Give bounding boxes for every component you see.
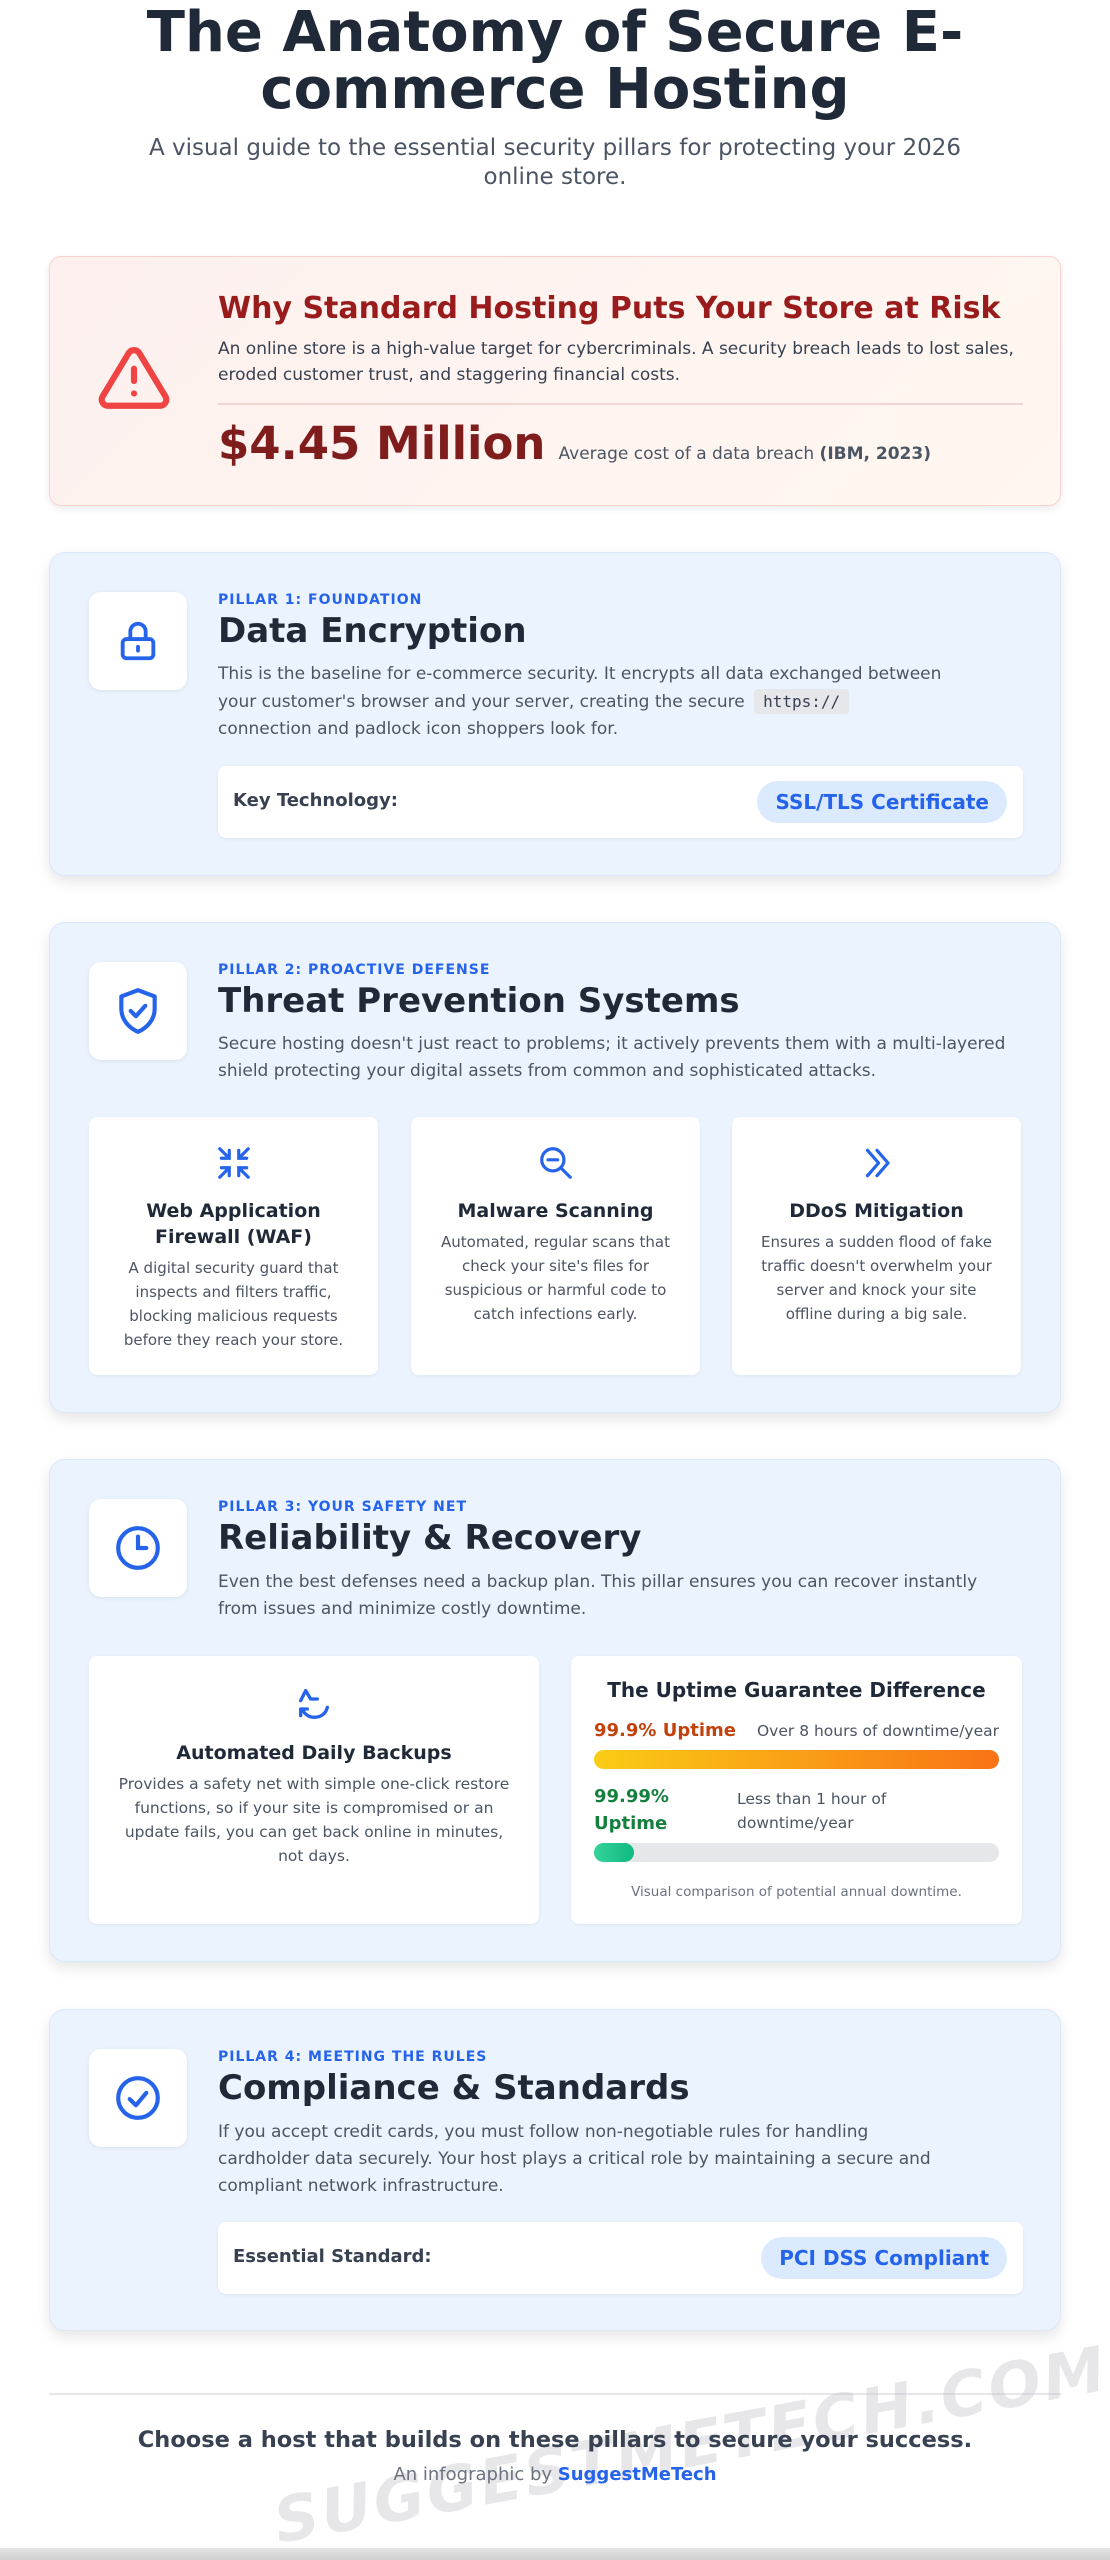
- panel: risk: [49, 256, 1061, 506]
- sub-card: DDoS: DDoS Mitigation: [789, 1200, 964, 1222]
- chart: uptime comparison: Uptime: [594, 1813, 667, 1834]
- heading: Reliability & Recovery: [218, 1518, 641, 1558]
- sub-card: malware: Malware Scanning: [458, 1200, 653, 1222]
- heading: Compliance & Standards: [218, 2068, 690, 2108]
- text: Even the best defenses need a backup plan. This pillar ensures you can recover instantly from issues and minimize costly downtime.: [218, 1572, 977, 1619]
- text: risk: An online store is a high-value target for cybercriminals. A security breach leads to lost sales, eroded customer trust, and staggering financial costs.: [218, 339, 1014, 385]
- icon: warning: [98, 347, 170, 409]
- icon: shield: [89, 962, 187, 1060]
- text: If you accept credit cards, you must follow non-negotiable rules for handling cardholder data securely. Your host plays a critical role by maintaining a secure and compliant network infrastructure.: [218, 2122, 931, 2196]
- sub-card: WAF: [89, 1117, 378, 1375]
- sub-card: WAF: Firewall (WAF): [155, 1226, 312, 1248]
- title: commerce Hosting: [260, 57, 850, 122]
- panel: pillar 4: [49, 2009, 1061, 2331]
- icon: sync: [298, 1688, 329, 1719]
- chart: uptime comparison: [571, 1656, 1022, 1924]
- text: This is the baseline for e-commerce security. It encrypts all data exchanged between your customer's browser and your server, creating the secure https://: [218, 664, 941, 712]
- sub-card: backups: [89, 1656, 539, 1924]
- essential standard bar: Essential Standard:: [233, 2246, 432, 2267]
- title: The Anatomy of Secure E-: [147, 0, 963, 65]
- footer credit: An infographic by SuggestMeTech: [393, 2464, 717, 2485]
- title: [147, 0, 963, 122]
- footer call to action: Choose a host that builds on these pillars to secure your success.: [138, 2427, 972, 2453]
- sub-card: malware: Automated, regular scans that check your site's files for suspicious or harmful code to catch infections early.: [441, 1233, 670, 1323]
- label: PILLAR 3: YOUR SAFETY NET: [218, 1499, 467, 1515]
- key technology bar: [218, 766, 1023, 838]
- watermark: SUGGESTMETECH.COM: [268, 2332, 1110, 2558]
- text: Secure hosting doesn't just react to problems; it actively prevents them with a multi-layered shield protecting your digital assets from common and sophisticated attacks.: [218, 1034, 1005, 1081]
- heading: risk: Why Standard Hosting Puts Your Store at Risk: [218, 291, 1000, 326]
- heading: Threat Prevention Systems: [218, 981, 740, 1021]
- chart: uptime comparison: Over 8 hours of downtime/year: [757, 1722, 999, 1740]
- chart: uptime comparison: 99.99%: [594, 1786, 669, 1807]
- sub-card: malware: [411, 1117, 700, 1375]
- sub-card: WAF: A digital security guard that inspects and filters traffic, blocking malicious requests before they reach your store.: [124, 1259, 343, 1349]
- essential standard bar: PCI DSS Compliant: [779, 2246, 989, 2270]
- panel: pillar 2: [49, 922, 1061, 1413]
- sub-card: DDoS: [732, 1117, 1021, 1375]
- subtitle: A visual guide to the essential security pillars for protecting your 2026 online store.: [149, 135, 961, 190]
- sub-card: backups: Provides a safety net with simple one-click restore functions, so if your site is compromised or an update fails, you can get back online in minutes, not days.: [119, 1775, 509, 1865]
- label: PILLAR 1: FOUNDATION: [218, 592, 422, 608]
- key technology bar: SSL/TLS Certificate: [775, 790, 989, 814]
- label: PILLAR 4: MEETING THE RULES: [218, 2049, 487, 2065]
- panel: pillar 1: [49, 552, 1061, 876]
- stat: breach cost: $4.45 Million Average cost of a data breach (IBM, 2023): [218, 417, 931, 470]
- text: [218, 664, 941, 739]
- icon: clock: [89, 1499, 187, 1597]
- sub-card: WAF: Web Application: [146, 1200, 321, 1222]
- key technology bar: Key Technology:: [233, 790, 398, 811]
- chart: uptime comparison: Visual comparison of potential annual downtime.: [631, 1884, 962, 1900]
- chart: uptime comparison: 99.9% Uptime: [594, 1720, 736, 1741]
- icon: lock: [89, 592, 187, 690]
- chart: uptime comparison: The Uptime Guarantee Difference: [607, 1678, 986, 1702]
- icon: chevrons: [866, 1148, 890, 1178]
- icon: arrows inward: [218, 1147, 250, 1179]
- panel: pillar 3: [49, 1459, 1061, 1962]
- sub-card: DDoS: Ensures a sudden flood of fake traffic doesn't overwhelm your server and knock your site offline during a big sale.: [761, 1233, 992, 1323]
- icon: magnifier: [540, 1147, 572, 1179]
- sub-card: backups: Automated Daily Backups: [176, 1742, 452, 1764]
- text: connection and padlock icon shoppers look for.: [218, 719, 618, 739]
- icon: check circle: [89, 2049, 187, 2147]
- heading: Data Encryption: [218, 611, 527, 651]
- chart: uptime comparison: Less than 1 hour of downtime/year: [737, 1790, 886, 1832]
- label: PILLAR 2: PROACTIVE DEFENSE: [218, 962, 490, 978]
- essential standard bar: [218, 2222, 1023, 2294]
